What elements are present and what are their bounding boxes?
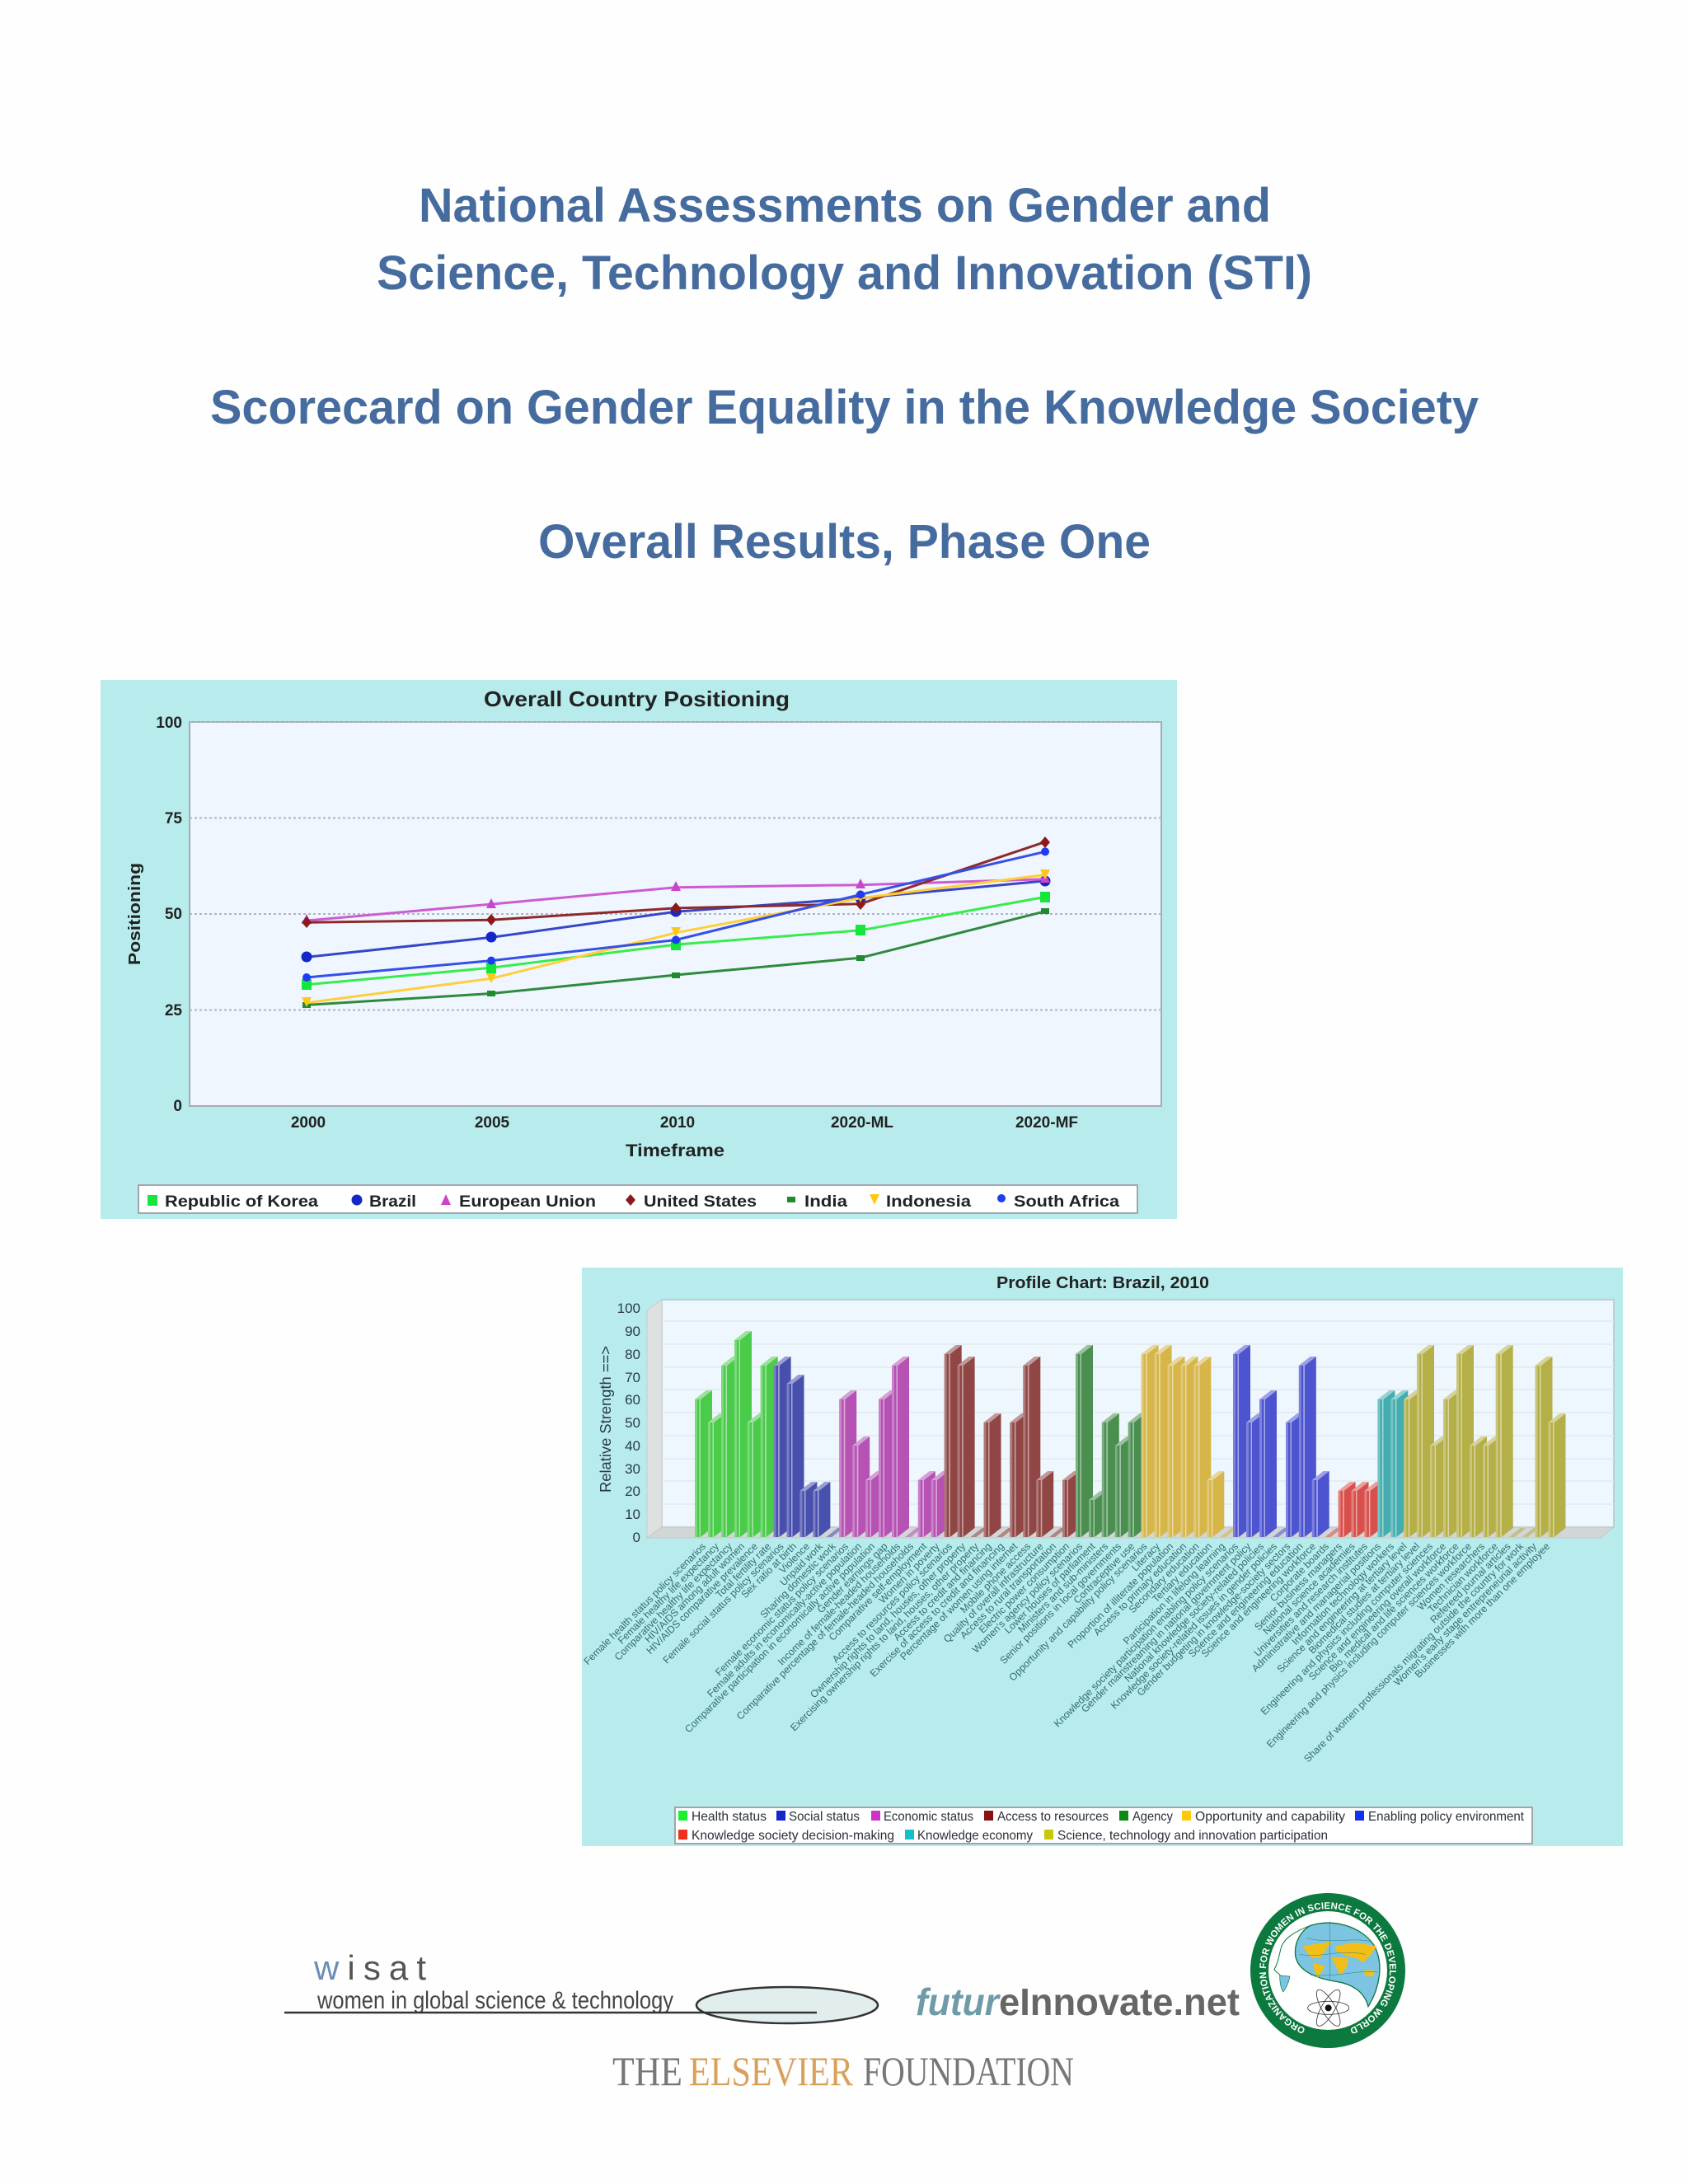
legend: European Union	[459, 1193, 596, 1211]
title block: Science, Technology and Innovation (STI)	[377, 246, 1312, 300]
logo: WISAT: wisat	[313, 1948, 426, 1987]
rotated category labels: Electric power consumption	[977, 1540, 1071, 1636]
title block: National Assessments on Gender and	[419, 179, 1271, 232]
legend: Science, technology and innovation participation	[1057, 1829, 1328, 1843]
y axis labels: 90	[625, 1324, 640, 1339]
rotated category labels: Secondary education	[1127, 1540, 1202, 1615]
y axis labels	[156, 715, 182, 1115]
chart title: Profile Chart: Brazil, 2010	[996, 1274, 1209, 1292]
rotated category labels: Bio, medical and life sciences workforce	[1327, 1540, 1461, 1675]
rotated category labels: Opportunity and capability policy scenarios	[1006, 1540, 1150, 1683]
bars: agency	[1076, 1345, 1146, 1537]
rotated category labels: Administrative and managerial positions	[1250, 1540, 1383, 1674]
rotated category labels: Female healthy life expectancy	[616, 1540, 722, 1646]
panel: profile chart Brazil 2010	[582, 1268, 1623, 1846]
y axis labels: 30	[625, 1461, 640, 1477]
rotated category labels: Exercise of access to credit and financing	[868, 1540, 1006, 1680]
legend	[675, 1807, 1532, 1844]
x axis labels: 2000	[291, 1114, 326, 1132]
x axis title: Timeframe	[626, 1141, 724, 1160]
y axis labels: 100	[617, 1301, 640, 1316]
rotated category labels: Women's agency policy scenarios	[970, 1540, 1085, 1655]
rotated category labels: Access to resources policy scenarios	[830, 1540, 954, 1665]
x axis labels: 2005	[475, 1114, 510, 1132]
y axis labels: 50	[625, 1415, 640, 1431]
legend: Brazil	[369, 1193, 416, 1211]
rotated category labels: Senior positions in local governments	[997, 1540, 1123, 1666]
bars: social status	[774, 1357, 843, 1537]
rotated category labels: Technician workforce	[1426, 1540, 1500, 1615]
y axis labels: 60	[625, 1392, 640, 1408]
logo: organization for women in science round seal: ORGANIZATION FOR WOMEN IN SCIENCE FOR THE DEVELOPING WORLD	[1259, 1902, 1396, 2034]
rotated category labels: Literacy	[1129, 1540, 1163, 1573]
rotated category labels: Women in poverty	[876, 1540, 942, 1605]
series: South Africa	[302, 847, 1049, 982]
rotated category labels: Access to primary education	[1091, 1540, 1189, 1638]
y axis labels: 20	[625, 1483, 640, 1499]
logo: WISAT: women in global science & technology	[316, 1987, 673, 2014]
legend: Opportunity and capability	[1195, 1810, 1345, 1824]
rotated category labels: Information technology workers	[1289, 1540, 1396, 1647]
legend: Access to resources	[997, 1810, 1109, 1824]
rotated category labels	[582, 1540, 1552, 1765]
rotated category labels: Lower houses of parliament	[1002, 1540, 1098, 1636]
rotated category labels: Engineering and physics including computer sciences workforce	[1264, 1540, 1474, 1750]
bars: knowledge economy	[1377, 1390, 1408, 1537]
rotated category labels: Quality of overall infrastructure	[941, 1540, 1046, 1645]
rotated category labels: Science and engineering at tertiary level	[1274, 1540, 1409, 1675]
rotated category labels: Knowledge society-related issues in gender policies	[1109, 1540, 1279, 1711]
rotated category labels: Contraceptive use	[1071, 1540, 1137, 1606]
title block: Overall Results, Phase One	[538, 515, 1151, 569]
rotated category labels: Proportion of illiterate population	[1066, 1540, 1175, 1651]
legend: Social status	[789, 1810, 860, 1824]
rotated category labels: Female economic status policy scenarios	[713, 1540, 851, 1678]
legend: Economic status	[884, 1810, 973, 1824]
series: European Union	[302, 873, 1050, 924]
legend: Knowledge economy	[917, 1829, 1033, 1843]
rotated category labels: Female health status policy scenarios	[582, 1540, 708, 1667]
rotated category labels: Science and engineering workforce	[1199, 1540, 1318, 1660]
series: Indonesia	[302, 869, 1050, 1007]
x axis labels: 2020-ML	[831, 1114, 893, 1132]
logo: The Elsevier Foundation	[612, 2048, 1074, 2094]
x axis labels	[291, 1114, 1078, 1132]
chart title: Overall Country Positioning	[484, 687, 790, 711]
x axis labels: 2010	[660, 1114, 695, 1132]
rotated category labels: Biomedical studies at tertiary level	[1306, 1540, 1422, 1656]
legend: South Africa	[1014, 1193, 1119, 1211]
logo: futureInnovate.net: eInnovate.net	[999, 1980, 1240, 2023]
rotated category labels: Refereed journal articles	[1428, 1540, 1513, 1626]
series: Republic of Korea	[302, 892, 1050, 990]
y axis title: Positioning	[126, 863, 144, 965]
rotated category labels: HIV/AIDS among adult women	[642, 1540, 747, 1645]
series: India	[302, 908, 1049, 1008]
plot area	[190, 722, 1161, 1106]
rotated category labels: Female adults in economically-active population	[705, 1540, 864, 1699]
bars	[695, 1331, 1566, 1537]
legend: Agency	[1132, 1810, 1173, 1824]
rotated category labels: Senior business managers	[1252, 1540, 1344, 1633]
legend: Enabling policy environment	[1368, 1810, 1525, 1824]
rotated category labels: Mobile phone access	[958, 1540, 1033, 1615]
rotated category labels: Participation in lifelong learning	[1121, 1540, 1227, 1647]
rotated category labels: HIV/AIDS comparative prevalence	[644, 1540, 760, 1657]
bars: opportunity and capability	[1142, 1345, 1237, 1537]
rotated category labels: Exercising ownership rights to land, houses, other property	[788, 1540, 982, 1733]
y axis labels: 0	[173, 1098, 182, 1115]
rotated category labels: Engineering and physics including computer sciences	[1259, 1540, 1435, 1718]
rotated category labels: Businesses with more than one employee	[1413, 1540, 1552, 1680]
rotated category labels: Comparative self-employment	[827, 1540, 930, 1643]
3D plot frame	[647, 1300, 1614, 1538]
bars: economic status	[839, 1357, 949, 1537]
bars: access to resources	[945, 1345, 1080, 1537]
y axis labels: 10	[625, 1507, 640, 1522]
y axis labels: 70	[625, 1370, 640, 1385]
y axis labels: 40	[625, 1438, 640, 1454]
bars: knowledge society decision-making	[1325, 1482, 1381, 1537]
y axis labels: 25	[165, 1002, 182, 1019]
bars: enabling policy environment	[1233, 1345, 1329, 1537]
rotated category labels: Female social status policy scenarios	[660, 1540, 786, 1666]
y axis labels: 75	[165, 810, 182, 827]
rotated category labels: Universities and research institutes	[1252, 1540, 1370, 1659]
rotated category labels: Gender budgeting in knowledge-society sectors	[1135, 1540, 1292, 1699]
legend: Health status	[692, 1810, 767, 1824]
logo: futureInnovate.net: futur	[916, 1980, 1001, 2023]
rotated category labels: Violence	[776, 1540, 812, 1576]
y axis labels: 100	[156, 715, 182, 732]
title block	[210, 179, 1479, 569]
rotated category labels: Women researchers	[1415, 1540, 1487, 1613]
rotated category labels: Tertiary education	[1150, 1540, 1214, 1605]
rotated category labels: Gender earnings gap	[815, 1540, 890, 1615]
rotated category labels: Unpaid work	[777, 1540, 826, 1588]
panel: overall country positioning line chart	[101, 680, 1177, 1219]
bars: science, technology and innovation participation	[1404, 1345, 1566, 1537]
bars: health status	[695, 1331, 778, 1537]
legend: United States	[644, 1193, 757, 1211]
y axis title: Relative Strength ==>	[598, 1346, 614, 1493]
y axis labels: 50	[165, 906, 182, 923]
rotated category labels: Comparative healthy life expectancy	[612, 1540, 735, 1663]
rotated category labels: Ownership rights to land, houses, other property	[808, 1540, 968, 1700]
legend: Indonesia	[886, 1193, 971, 1211]
logo: The Elsevier Foundation: THE	[612, 2048, 682, 2094]
rotated category labels: Comparative percentage of female-headed households	[734, 1540, 916, 1722]
logo: WISAT	[284, 1948, 878, 2023]
rotated category labels: Income of female-headed households	[776, 1540, 903, 1667]
legend: Republic of Korea	[165, 1193, 318, 1211]
logo: The Elsevier Foundation: FOUNDATION	[863, 2048, 1074, 2094]
series: United States	[302, 837, 1050, 928]
rotated category labels: Total fertility rate	[713, 1540, 773, 1601]
rotated category labels: Knowledge society participation enabling policy scenarios	[1052, 1540, 1240, 1730]
rotated category labels: Women's early stage entrepreneurial activity	[1391, 1540, 1540, 1688]
rotated category labels: Sex ratio at birth	[738, 1540, 799, 1601]
legend: India	[804, 1193, 847, 1211]
rotated category labels: Science and engineering education	[1186, 1540, 1306, 1660]
rotated category labels: Percentage of women using internet	[898, 1540, 1020, 1662]
rotated category labels: Access to credit and financing	[891, 1540, 994, 1643]
y axis labels: 80	[625, 1347, 640, 1362]
rotated category labels: Corporate boards	[1268, 1540, 1331, 1604]
rotated category labels: Share of women professionals migrating outside the country for work	[1301, 1540, 1526, 1765]
logo: The Elsevier Foundation: ELSEVIER	[689, 2048, 854, 2094]
x axis labels: 2020-MF	[1015, 1114, 1078, 1132]
title block: Scorecard on Gender Equality in the Knowledge Society	[210, 381, 1479, 434]
y axis labels: 0	[633, 1530, 640, 1545]
rotated category labels: Science and engineering overall workforce	[1306, 1540, 1448, 1683]
rotated category labels: Access to rural transportation	[958, 1540, 1058, 1641]
rotated category labels: National knowledge society-related policies	[1122, 1540, 1266, 1685]
rotated category labels: National science academies	[1260, 1540, 1357, 1637]
series: Brazil	[302, 875, 1050, 963]
rotated category labels: Ministers and sub-ministers	[1015, 1540, 1110, 1635]
rotated category labels: Sharing domestic work	[758, 1540, 838, 1620]
legend: Knowledge society decision-making	[692, 1829, 894, 1843]
rotated category labels: Gender mainstreaming in national government policy	[1079, 1540, 1254, 1715]
rotated category labels: Comparative participation in economically active population	[682, 1540, 877, 1735]
y axis labels	[617, 1301, 640, 1545]
legend	[138, 1185, 1137, 1213]
